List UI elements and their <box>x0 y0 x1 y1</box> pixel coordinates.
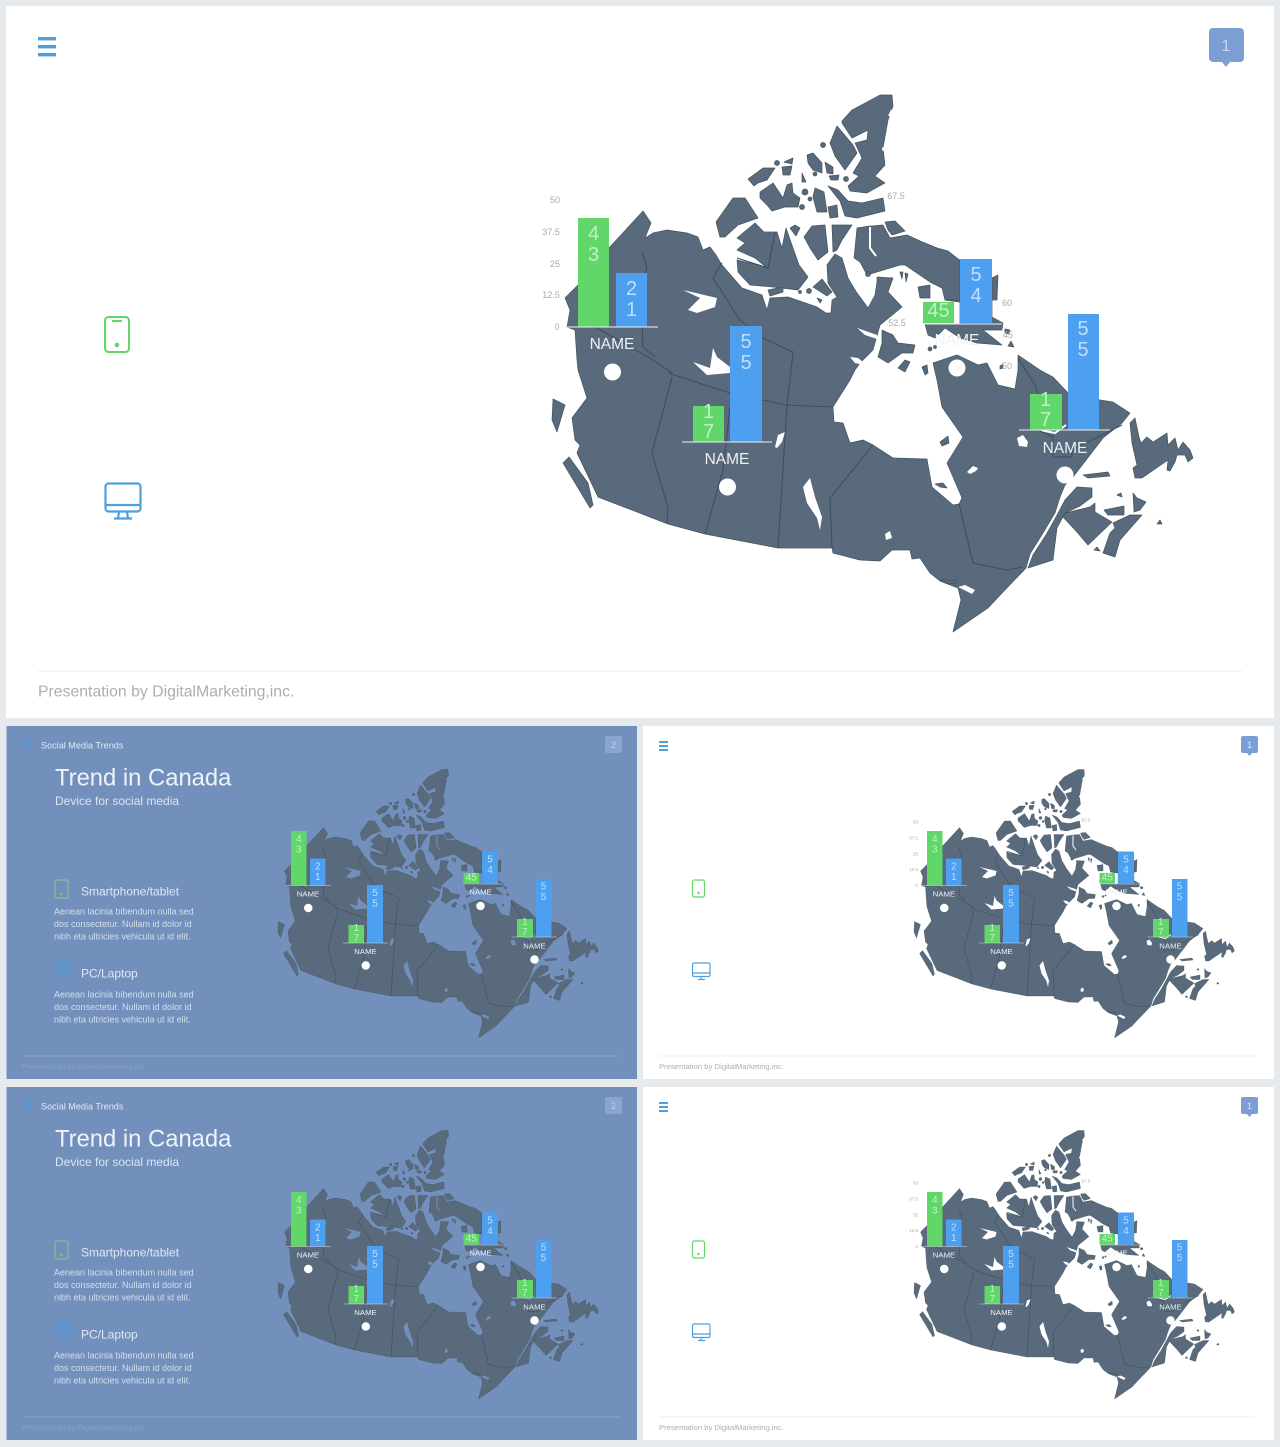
chart group: 1 <box>989 923 995 934</box>
chart group: 5 <box>1123 1216 1129 1226</box>
chart group: 45 <box>466 1234 477 1244</box>
item: pc: dos consectetur. Nullam id dolor id <box>54 1002 192 1012</box>
subtitle: Device for social media <box>55 794 179 808</box>
chart group: 3 <box>296 844 302 856</box>
chart group: 1 <box>951 1233 957 1244</box>
map of Canada <box>278 1130 598 1399</box>
chart group: 45 <box>466 872 477 884</box>
bar chart: north: 60 <box>1002 298 1012 308</box>
chart group: 1 <box>951 872 957 883</box>
chart group: 1 <box>989 1284 995 1295</box>
bar chart: east: 7 <box>1040 409 1051 431</box>
map of Canada <box>914 1130 1234 1399</box>
chart group: 2 <box>315 862 321 872</box>
badge: 2 <box>611 740 616 750</box>
chart group: 5 <box>487 1216 493 1226</box>
icon: menu <box>659 741 668 751</box>
chart group: 7 <box>353 1294 359 1305</box>
chart group: 7 <box>353 933 359 944</box>
chart group: 5 <box>541 892 547 903</box>
chart group: 50 <box>913 820 918 824</box>
chart group: NAME <box>354 1308 377 1317</box>
subtitle: Device for social media <box>55 1155 179 1169</box>
item: pc <box>54 1322 194 1386</box>
icon: monitor <box>692 1324 710 1340</box>
chart group: 4 <box>296 1195 302 1206</box>
chart group: 4 <box>1123 1226 1129 1237</box>
chart group: 5 <box>1177 1253 1183 1264</box>
chart group: 5 <box>541 1242 547 1254</box>
chart group: NAME <box>297 1250 319 1260</box>
chart group: 1 <box>315 1233 321 1244</box>
chart group <box>286 1192 557 1331</box>
footer: Presentation by DigitalMarketing,inc. <box>38 684 294 700</box>
bar chart: east: NAME <box>1043 440 1087 457</box>
chart group: NAME <box>523 942 546 950</box>
header label: Social Media Trends <box>41 740 124 750</box>
chart group: 5 <box>1008 1249 1014 1260</box>
map of Canada <box>278 770 598 1038</box>
chart group: 4 <box>932 1195 938 1206</box>
chart group: 7 <box>1158 927 1164 938</box>
panel: blue slide bottom <box>6 1087 637 1440</box>
item: pc: PC/Laptop <box>81 1328 138 1342</box>
chart group: 4 <box>1123 865 1129 876</box>
icon: page badge <box>1209 28 1244 67</box>
chart group: 7 <box>989 1294 995 1305</box>
item: smartphone: nibh eta ultricies vehicula ut id elit. <box>54 1292 191 1302</box>
item: pc: dos consectetur. Nullam id dolor id <box>54 1363 192 1373</box>
chart group: NAME <box>933 890 955 898</box>
footer: Presentation by DigitalMarketing,inc. <box>659 1062 784 1071</box>
chart group: NAME <box>1105 888 1128 896</box>
badge: 1 <box>1247 740 1252 750</box>
bar chart: north: 50 <box>1002 361 1012 371</box>
chart group: 5 <box>1177 882 1183 892</box>
bar chart: north: 4 <box>970 285 982 307</box>
chart group: 12.5 <box>909 867 918 872</box>
chart group: 2 <box>951 1222 957 1234</box>
bar chart: north: 67.5 <box>887 191 905 201</box>
icon: monitor <box>692 963 710 980</box>
footer: Presentation by DigitalMarketing,inc. <box>659 1423 784 1432</box>
badge <box>1241 736 1258 756</box>
chart group: NAME <box>933 1250 955 1260</box>
badge <box>1241 1097 1258 1117</box>
footer: Presentation by DigitalMarketing,inc. <box>22 1423 147 1432</box>
chart group: 1 <box>522 1278 528 1289</box>
chart group: NAME <box>469 888 492 896</box>
chart group: 5 <box>372 888 378 899</box>
chart group: 5 <box>541 1253 547 1264</box>
icon: smartphone <box>105 317 129 352</box>
bar chart: prairies: 5 <box>740 352 752 374</box>
chart group: 5 <box>1177 1242 1183 1254</box>
chart group: 25 <box>913 1212 918 1218</box>
item: pc: nibh eta ultricies vehicula ut id elit. <box>54 1014 191 1024</box>
title: Trend in Canada <box>55 1126 232 1152</box>
bar chart: west <box>542 195 658 380</box>
chart group: NAME <box>469 1248 492 1258</box>
item: smartphone <box>54 880 194 942</box>
chart group: 5 <box>1177 892 1183 903</box>
map of Canada <box>552 95 1193 632</box>
panel: blue slide top <box>6 726 637 1079</box>
chart group: 5 <box>1008 898 1014 910</box>
footer: Presentation by DigitalMarketing,inc. <box>22 1062 147 1071</box>
chart group: NAME <box>523 1302 546 1312</box>
chart group: 3 <box>932 1206 938 1216</box>
chart group: 67.5 <box>1082 1178 1091 1184</box>
chart group: 1 <box>1158 1278 1164 1289</box>
icon: menu <box>23 1099 32 1111</box>
chart group: 1 <box>522 917 528 928</box>
chart group: 1 <box>1158 917 1164 928</box>
chart group: 5 <box>541 882 547 892</box>
chart group: NAME <box>354 947 377 956</box>
bar chart: east: 5 <box>1077 339 1089 361</box>
item: pc <box>54 961 194 1024</box>
chart group: 4 <box>296 834 302 845</box>
chart group <box>909 818 1193 970</box>
item: smartphone: Smartphone/tablet <box>81 1246 180 1260</box>
icon: menu <box>38 37 56 56</box>
chart group: 25 <box>913 852 918 856</box>
icon: smartphone <box>692 880 704 897</box>
chart group: 37.5 <box>909 836 918 840</box>
header label: Social Media Trends <box>41 1102 124 1112</box>
chart group: 67.5 <box>1082 818 1091 822</box>
item: smartphone: Aenean lacinia bibendum nulla sed <box>54 1268 194 1278</box>
item: smartphone <box>54 1241 194 1302</box>
bar chart: west: 3 <box>588 244 599 266</box>
badge <box>605 1097 622 1114</box>
icon: menu <box>659 1102 668 1112</box>
chart group: 3 <box>296 1206 302 1216</box>
chart group: 5 <box>372 898 378 910</box>
chart group: 50 <box>913 1180 918 1186</box>
item: pc: Aenean lacinia bibendum nulla sed <box>54 990 194 1000</box>
bar chart: north: NAME <box>935 332 979 349</box>
bar chart: prairies <box>682 326 772 496</box>
chart group: 5 <box>487 854 493 866</box>
panel: white slide bottom <box>643 1087 1274 1440</box>
panel: main slide <box>6 6 1274 718</box>
icon: page badge: 1 <box>1222 38 1231 55</box>
chart group: 4 <box>487 865 493 876</box>
icon: smartphone <box>692 1241 704 1258</box>
panel: white slide top <box>643 726 1274 1079</box>
bar chart: west: 2 <box>626 278 637 300</box>
bar chart: east: 1 <box>1040 389 1051 411</box>
chart group: 0 <box>915 883 918 888</box>
chart group: 2 <box>315 1222 321 1234</box>
map of Canada <box>914 770 1234 1038</box>
title: Trend in Canada <box>55 764 232 792</box>
bar chart: north: 52.5 <box>888 318 906 328</box>
bar chart: prairies: NAME <box>705 451 749 468</box>
chart group: 5 <box>1008 888 1014 899</box>
item: smartphone: nibh eta ultricies vehicula ut id elit. <box>54 932 191 942</box>
bar chart: prairies: 1 <box>703 401 714 423</box>
badge: 1 <box>1247 1101 1252 1111</box>
chart group: 4 <box>487 1226 493 1237</box>
chart group: 45 <box>1102 872 1113 884</box>
chart group: 7 <box>522 927 528 938</box>
badge <box>605 736 622 753</box>
chart group: 7 <box>522 1288 528 1299</box>
chart group: NAME <box>1159 1302 1182 1312</box>
bar chart: west: 37.5 <box>542 227 560 237</box>
chart group: 12.5 <box>909 1228 918 1233</box>
item: pc: nibh eta ultricies vehicula ut id elit. <box>54 1376 191 1386</box>
item: smartphone: dos consectetur. Nullam id dolor id <box>54 919 192 929</box>
chart group: 3 <box>932 844 938 856</box>
chart group: 2 <box>951 862 957 872</box>
bar chart: west: NAME <box>590 336 634 353</box>
chart group: NAME <box>1105 1248 1128 1258</box>
item: pc: PC/Laptop <box>81 966 138 980</box>
chart group: 7 <box>1158 1288 1164 1299</box>
chart group: 45 <box>1102 1234 1113 1244</box>
bar chart: west: 4 <box>588 223 599 245</box>
item: smartphone: dos consectetur. Nullam id dolor id <box>54 1280 192 1290</box>
item: smartphone: Aenean lacinia bibendum nulla sed <box>54 906 194 916</box>
bar chart: west: 1 <box>626 299 637 321</box>
icon: menu <box>23 738 32 750</box>
chart group: 5 <box>1123 854 1129 866</box>
bar chart: north <box>887 191 1013 376</box>
chart group: NAME <box>1159 942 1182 950</box>
chart group <box>542 191 1110 496</box>
chart group: 5 <box>1008 1260 1014 1270</box>
chart group: 1 <box>353 923 359 934</box>
bar chart: west: 12.5 <box>542 290 560 300</box>
bar chart: west: 25 <box>550 259 560 269</box>
chart group: 5 <box>372 1249 378 1260</box>
chart group: NAME <box>990 1308 1013 1317</box>
bar chart: east: 5 <box>1077 318 1089 340</box>
chart group: NAME <box>990 947 1013 956</box>
bar chart: north: 45 <box>927 300 950 322</box>
item: smartphone: Smartphone/tablet <box>81 884 180 898</box>
chart group: NAME <box>297 890 319 898</box>
bar chart: prairies: 7 <box>703 421 714 443</box>
bar chart: north: 45 <box>1003 330 1013 340</box>
bar chart: west: 0 <box>554 322 560 332</box>
badge: 2 <box>611 1101 616 1111</box>
chart group <box>909 1178 1193 1331</box>
item: pc: Aenean lacinia bibendum nulla sed <box>54 1350 194 1360</box>
chart group: 1 <box>353 1284 359 1295</box>
chart group: 1 <box>315 872 321 883</box>
chart group: 7 <box>989 933 995 944</box>
bar chart: west: 50 <box>550 195 560 205</box>
icon: monitor <box>106 484 140 518</box>
chart group: 0 <box>915 1244 918 1249</box>
chart group: 5 <box>372 1260 378 1270</box>
bar chart: east <box>1019 314 1110 484</box>
chart group: 4 <box>932 834 938 845</box>
bar chart: prairies: 5 <box>740 331 752 353</box>
chart group: 37.5 <box>909 1196 918 1202</box>
bar chart: north: 5 <box>970 264 982 286</box>
chart group <box>286 831 557 970</box>
